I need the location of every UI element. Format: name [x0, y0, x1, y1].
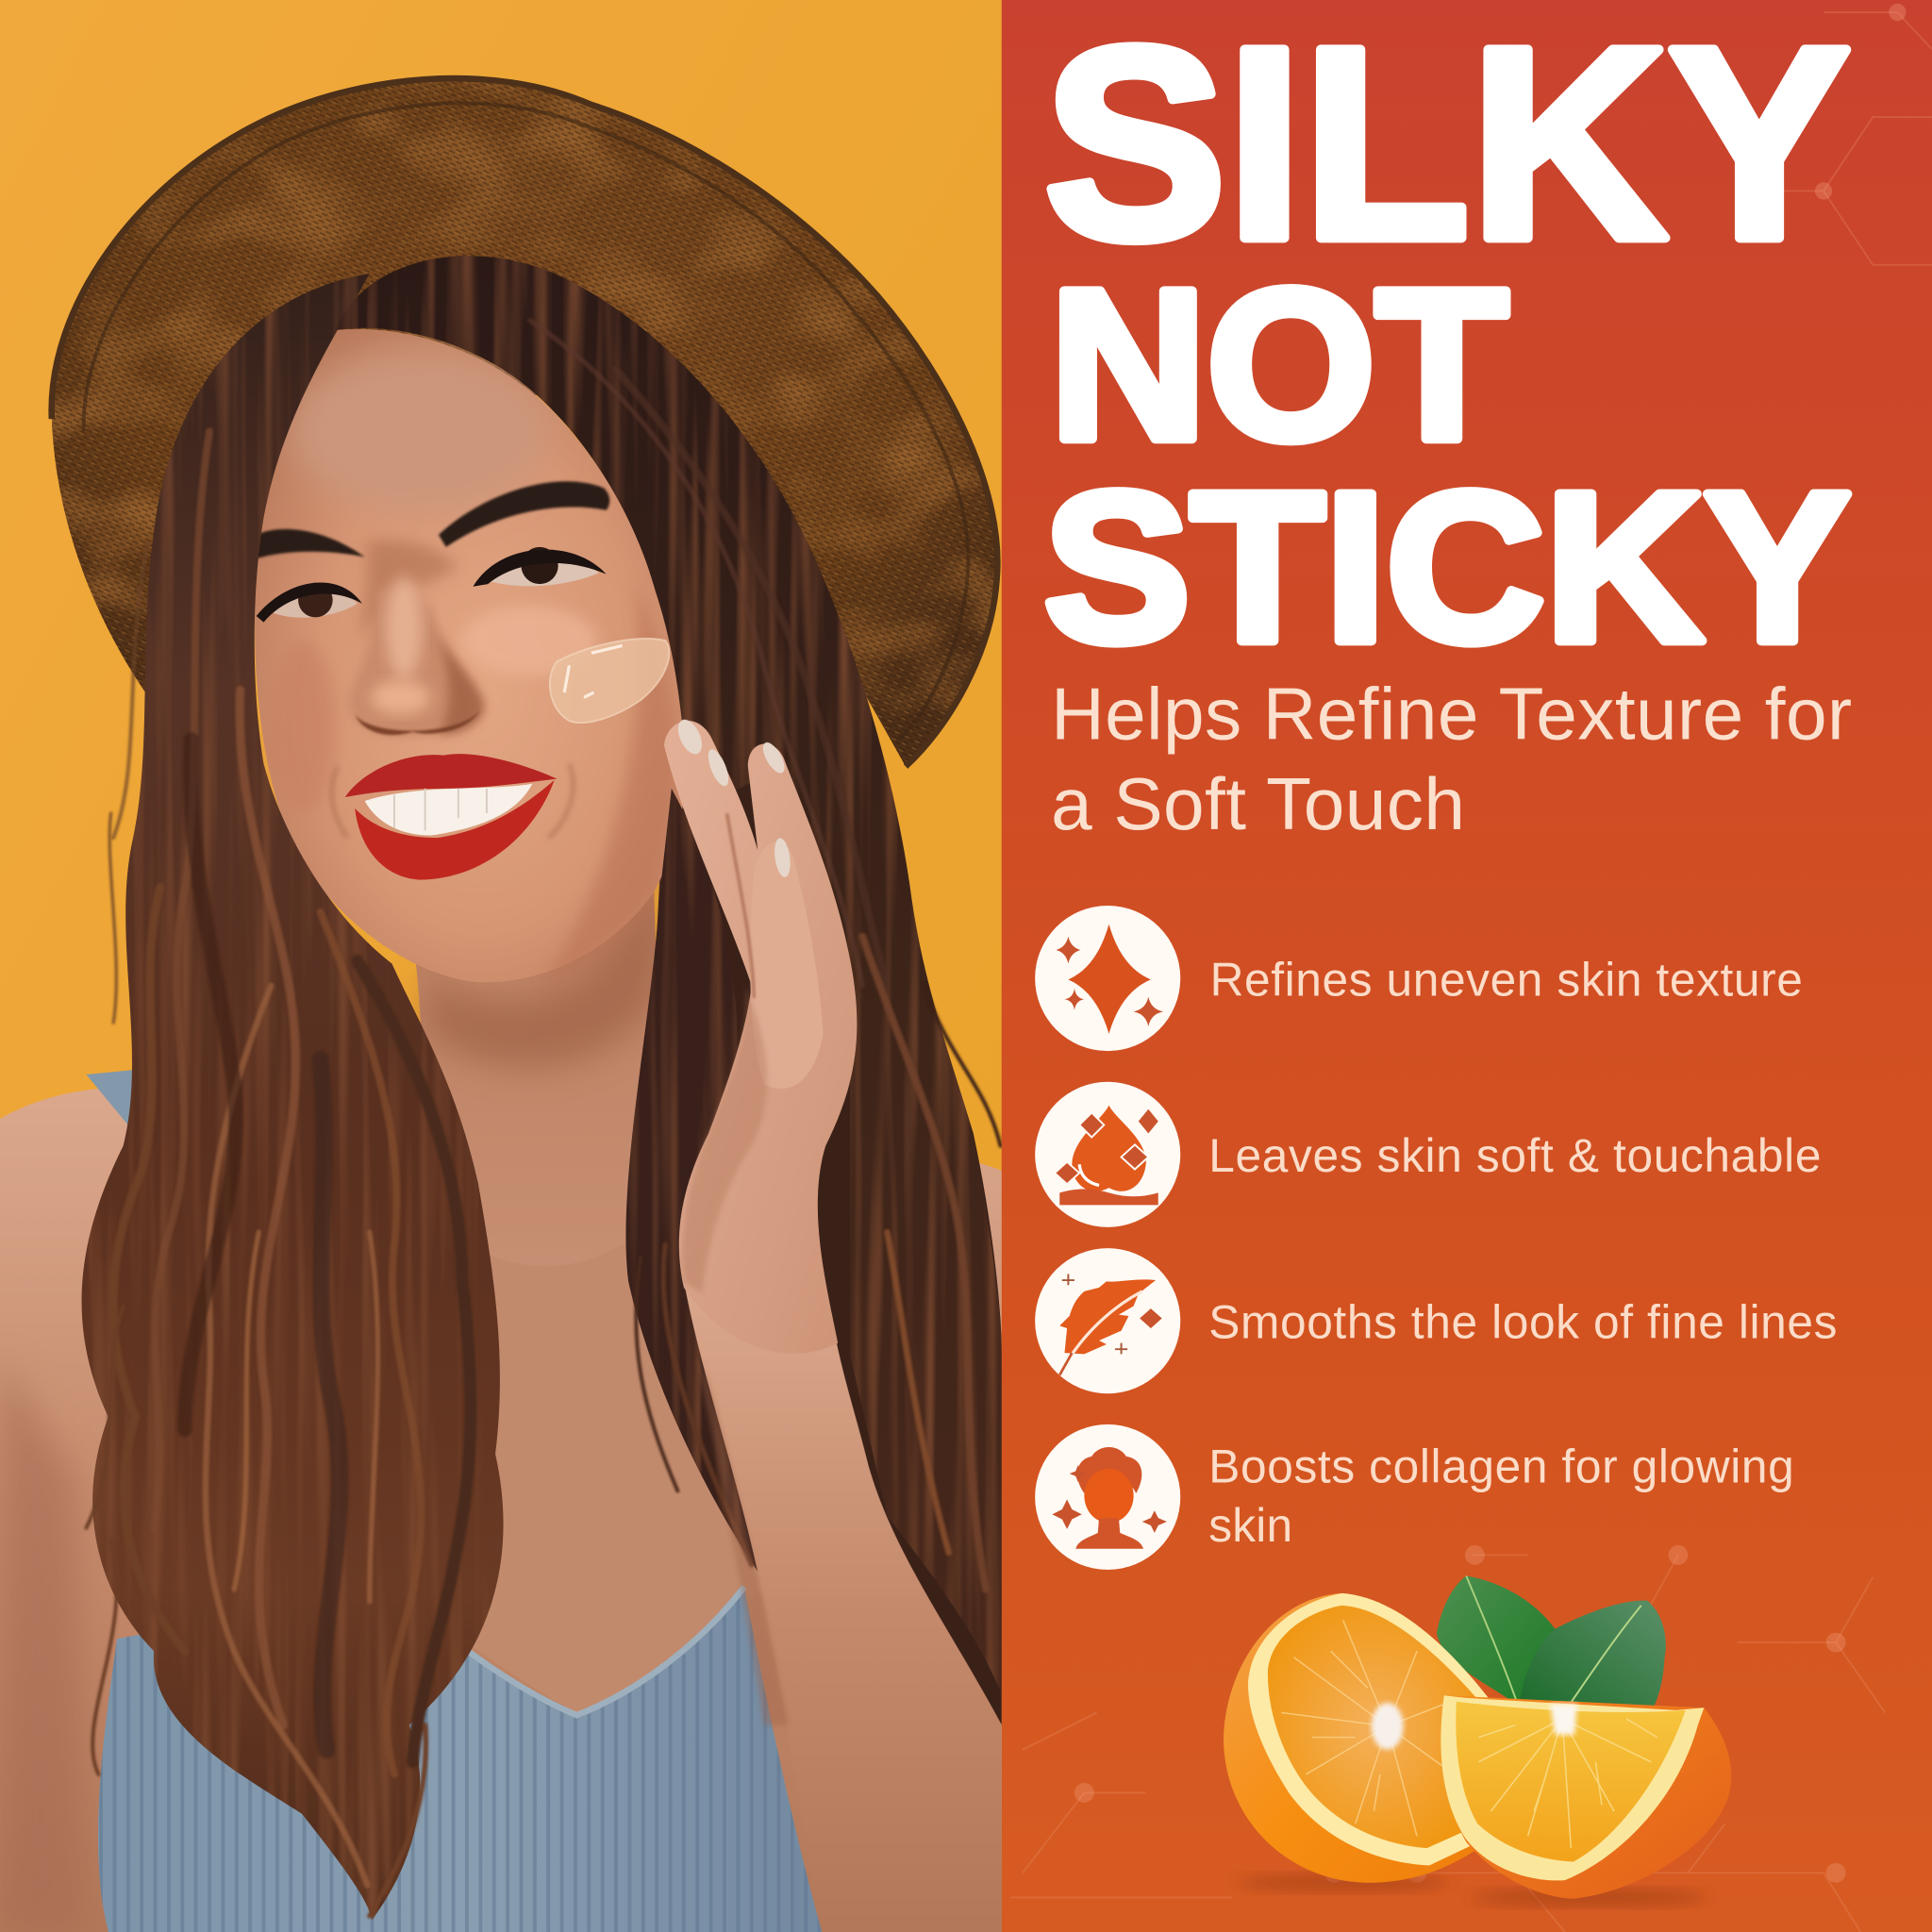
- right cheek shading: [542, 579, 675, 982]
- ground shadow right: [1473, 1889, 1707, 1907]
- ground shadow left: [1239, 1874, 1448, 1891]
- molecular network pattern: [1010, 12, 1932, 1932]
- upper lip: [345, 754, 557, 797]
- top body: [98, 1587, 822, 1932]
- shoulders and chest: [0, 1088, 1002, 1932]
- face: [251, 329, 688, 982]
- palm shadow: [682, 986, 767, 1293]
- nose tip highlight: [371, 680, 430, 715]
- wedge segments: [1478, 1719, 1657, 1848]
- wedge peel: [1442, 1695, 1731, 1899]
- top ribs: [98, 1587, 822, 1932]
- hair: [82, 256, 1002, 1920]
- wedge rim: [1441, 1695, 1704, 1880]
- right hair strands: [109, 321, 1001, 1590]
- under eye highlight: [462, 607, 597, 675]
- neckline trim: [468, 1585, 747, 1719]
- hand and forearm: [664, 716, 1002, 1932]
- smile crease: [332, 764, 574, 838]
- icon: sparkle: [1035, 906, 1180, 1051]
- wedge pulp: [1456, 1702, 1686, 1862]
- lower lip: [355, 780, 555, 880]
- hat edge: [52, 78, 997, 766]
- left iris: [298, 583, 333, 617]
- benefit text: Leaves skin soft & touchable: [1208, 1129, 1821, 1182]
- wedge core: [1550, 1704, 1577, 1735]
- neck: [416, 891, 656, 1171]
- icon: water drop: [1035, 1082, 1180, 1227]
- benefit: refines texture: [1035, 906, 1803, 1051]
- leaf left vein: [1466, 1576, 1518, 1706]
- leaf left: [1437, 1576, 1555, 1706]
- nose: [349, 587, 483, 736]
- icon: head with towel: [1035, 1424, 1180, 1570]
- left eyebrow: [251, 529, 365, 559]
- right lashes: [474, 549, 607, 587]
- subtitle line 1: Helps Refine Texture for: [1051, 673, 1852, 756]
- subtitle line 2: a Soft Touch: [1051, 762, 1465, 845]
- panel background: [1002, 0, 1932, 1932]
- nose side shadow: [434, 623, 484, 734]
- forearm shade: [696, 1356, 789, 1725]
- leaf right: [1519, 1601, 1666, 1713]
- benefit text line 2: skin: [1208, 1499, 1292, 1552]
- right iris: [521, 547, 558, 584]
- forearm: [684, 1281, 1002, 1932]
- left hair strands: [86, 431, 471, 1916]
- left hair mass: [82, 274, 504, 1920]
- gel cream patch: [550, 639, 669, 723]
- chest shading: [490, 1242, 671, 1711]
- panel: product photo: [0, 0, 1002, 1932]
- photo background: [0, 0, 1002, 1343]
- left lashes: [257, 582, 362, 623]
- gel highlight: [564, 645, 623, 697]
- tank top: [86, 1070, 822, 1932]
- hat: [52, 78, 997, 766]
- palm and fingers: [664, 721, 857, 1354]
- subtitle: [1051, 673, 1852, 845]
- orange half peel: [1224, 1593, 1489, 1883]
- hat brim: [52, 78, 997, 766]
- panel: benefits: [1002, 0, 1932, 1932]
- network nodes: [1074, 4, 1907, 1883]
- benefit text: Refines uneven skin texture: [1210, 953, 1803, 1006]
- front finger: [750, 841, 823, 1089]
- leaf right vein: [1567, 1606, 1641, 1707]
- hat weave: [52, 78, 997, 766]
- nose underside: [355, 709, 480, 735]
- title line 3: STICKY: [1043, 447, 1851, 686]
- right eye: [483, 558, 599, 586]
- benefit: fine lines: [1035, 1248, 1837, 1393]
- strap: [87, 1070, 132, 1124]
- orange half rim: [1248, 1593, 1489, 1865]
- teeth: [365, 784, 532, 836]
- right eyebrow: [439, 481, 609, 547]
- right hair mass: [335, 256, 1002, 1694]
- title: [1043, 0, 1851, 686]
- left eye: [264, 588, 358, 618]
- hair behind hand: [640, 764, 1002, 1725]
- benefit: collagen glow: [1035, 1424, 1794, 1570]
- left arm shading: [0, 1382, 79, 1909]
- benefit text: Smooths the look of fine lines: [1208, 1295, 1837, 1348]
- hat rim line: [84, 103, 968, 740]
- orange half pulp: [1268, 1606, 1478, 1848]
- nails: [674, 716, 792, 878]
- finger line: [727, 813, 754, 998]
- eye socket shadow: [359, 541, 458, 641]
- title line 2: NOT: [1050, 245, 1508, 485]
- neck shadow: [425, 887, 659, 1068]
- nose highlight: [386, 576, 423, 680]
- orange half core: [1372, 1703, 1404, 1750]
- title line 1: SILKY: [1043, 0, 1851, 296]
- orange half segments: [1281, 1621, 1454, 1836]
- left cheek tone: [267, 641, 337, 813]
- icon: feather: [1035, 1248, 1180, 1393]
- tooth gaps: [394, 789, 487, 830]
- oranges and leaves: [1224, 1576, 1731, 1907]
- hair over chest: [625, 789, 789, 1614]
- face skin: [255, 329, 688, 982]
- benefit text: [1208, 1440, 1794, 1552]
- benefit text line 1: Boosts collagen for glowing: [1208, 1440, 1794, 1492]
- benefit: soft skin: [1035, 1082, 1821, 1227]
- forehead tone: [290, 351, 548, 511]
